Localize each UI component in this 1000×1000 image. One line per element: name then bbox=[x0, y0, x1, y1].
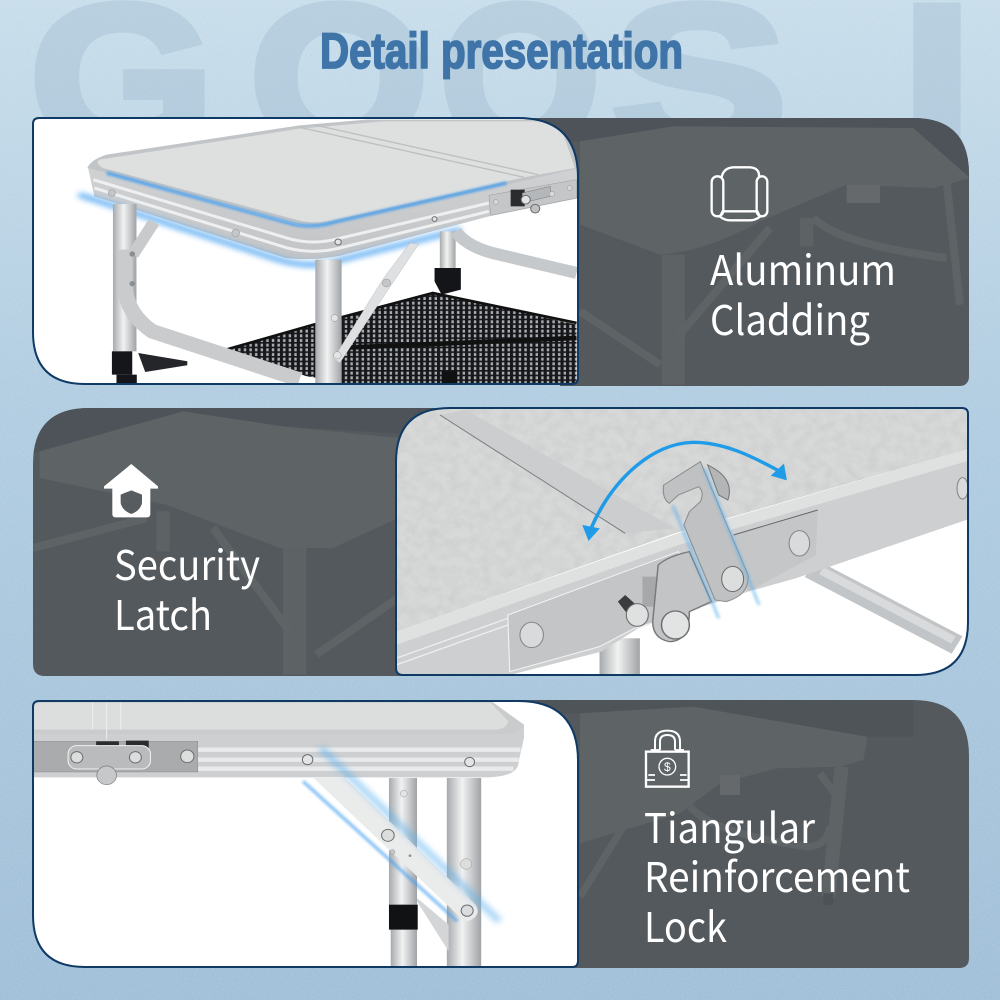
panel: aluminum cladding bbox=[33, 118, 970, 388]
mesh bbox=[226, 293, 577, 388]
icon: house shield bbox=[104, 464, 158, 517]
plates bbox=[508, 552, 700, 672]
label: Lock bbox=[644, 894, 727, 954]
label: Security bbox=[114, 532, 260, 592]
brace bbox=[314, 778, 478, 921]
legs bbox=[447, 778, 481, 970]
icon: padlock: $ bbox=[664, 760, 671, 774]
photo: folding brace bbox=[33, 700, 579, 970]
photo: latch close-up bbox=[396, 405, 971, 676]
back hinge bbox=[653, 552, 711, 642]
dark card 2 bbox=[33, 408, 466, 676]
icon: padlock bbox=[646, 731, 689, 787]
tube and leg bbox=[810, 568, 957, 645]
label: Aluminum bbox=[710, 237, 896, 297]
tabletop bbox=[396, 405, 971, 632]
watermark letters bbox=[30, 0, 972, 192]
panel: triangular reinforcement lock bbox=[33, 700, 969, 970]
label: Cladding bbox=[710, 287, 870, 347]
photo border bbox=[396, 408, 968, 675]
icon: armchair bbox=[712, 167, 767, 220]
label bbox=[644, 795, 910, 954]
photo: table with aluminum edge bbox=[33, 118, 580, 388]
rail bbox=[396, 448, 971, 675]
hook bbox=[708, 465, 729, 500]
label: Tiangular bbox=[644, 795, 815, 855]
arrow bbox=[590, 442, 777, 530]
title: Detail presentation bbox=[320, 23, 683, 79]
table bbox=[33, 725, 524, 777]
label bbox=[114, 532, 260, 642]
screws bbox=[520, 622, 543, 648]
dark card 3 bbox=[480, 700, 969, 968]
photo border bbox=[33, 701, 578, 967]
table bbox=[88, 168, 580, 259]
legs bbox=[113, 204, 136, 351]
label: Reinforcement bbox=[644, 844, 910, 904]
dark card 1 bbox=[532, 118, 969, 386]
photo border bbox=[33, 118, 578, 384]
hinge plate bbox=[33, 741, 198, 772]
label bbox=[710, 237, 896, 347]
panel: security latch bbox=[33, 405, 971, 676]
label: Latch bbox=[114, 582, 212, 642]
